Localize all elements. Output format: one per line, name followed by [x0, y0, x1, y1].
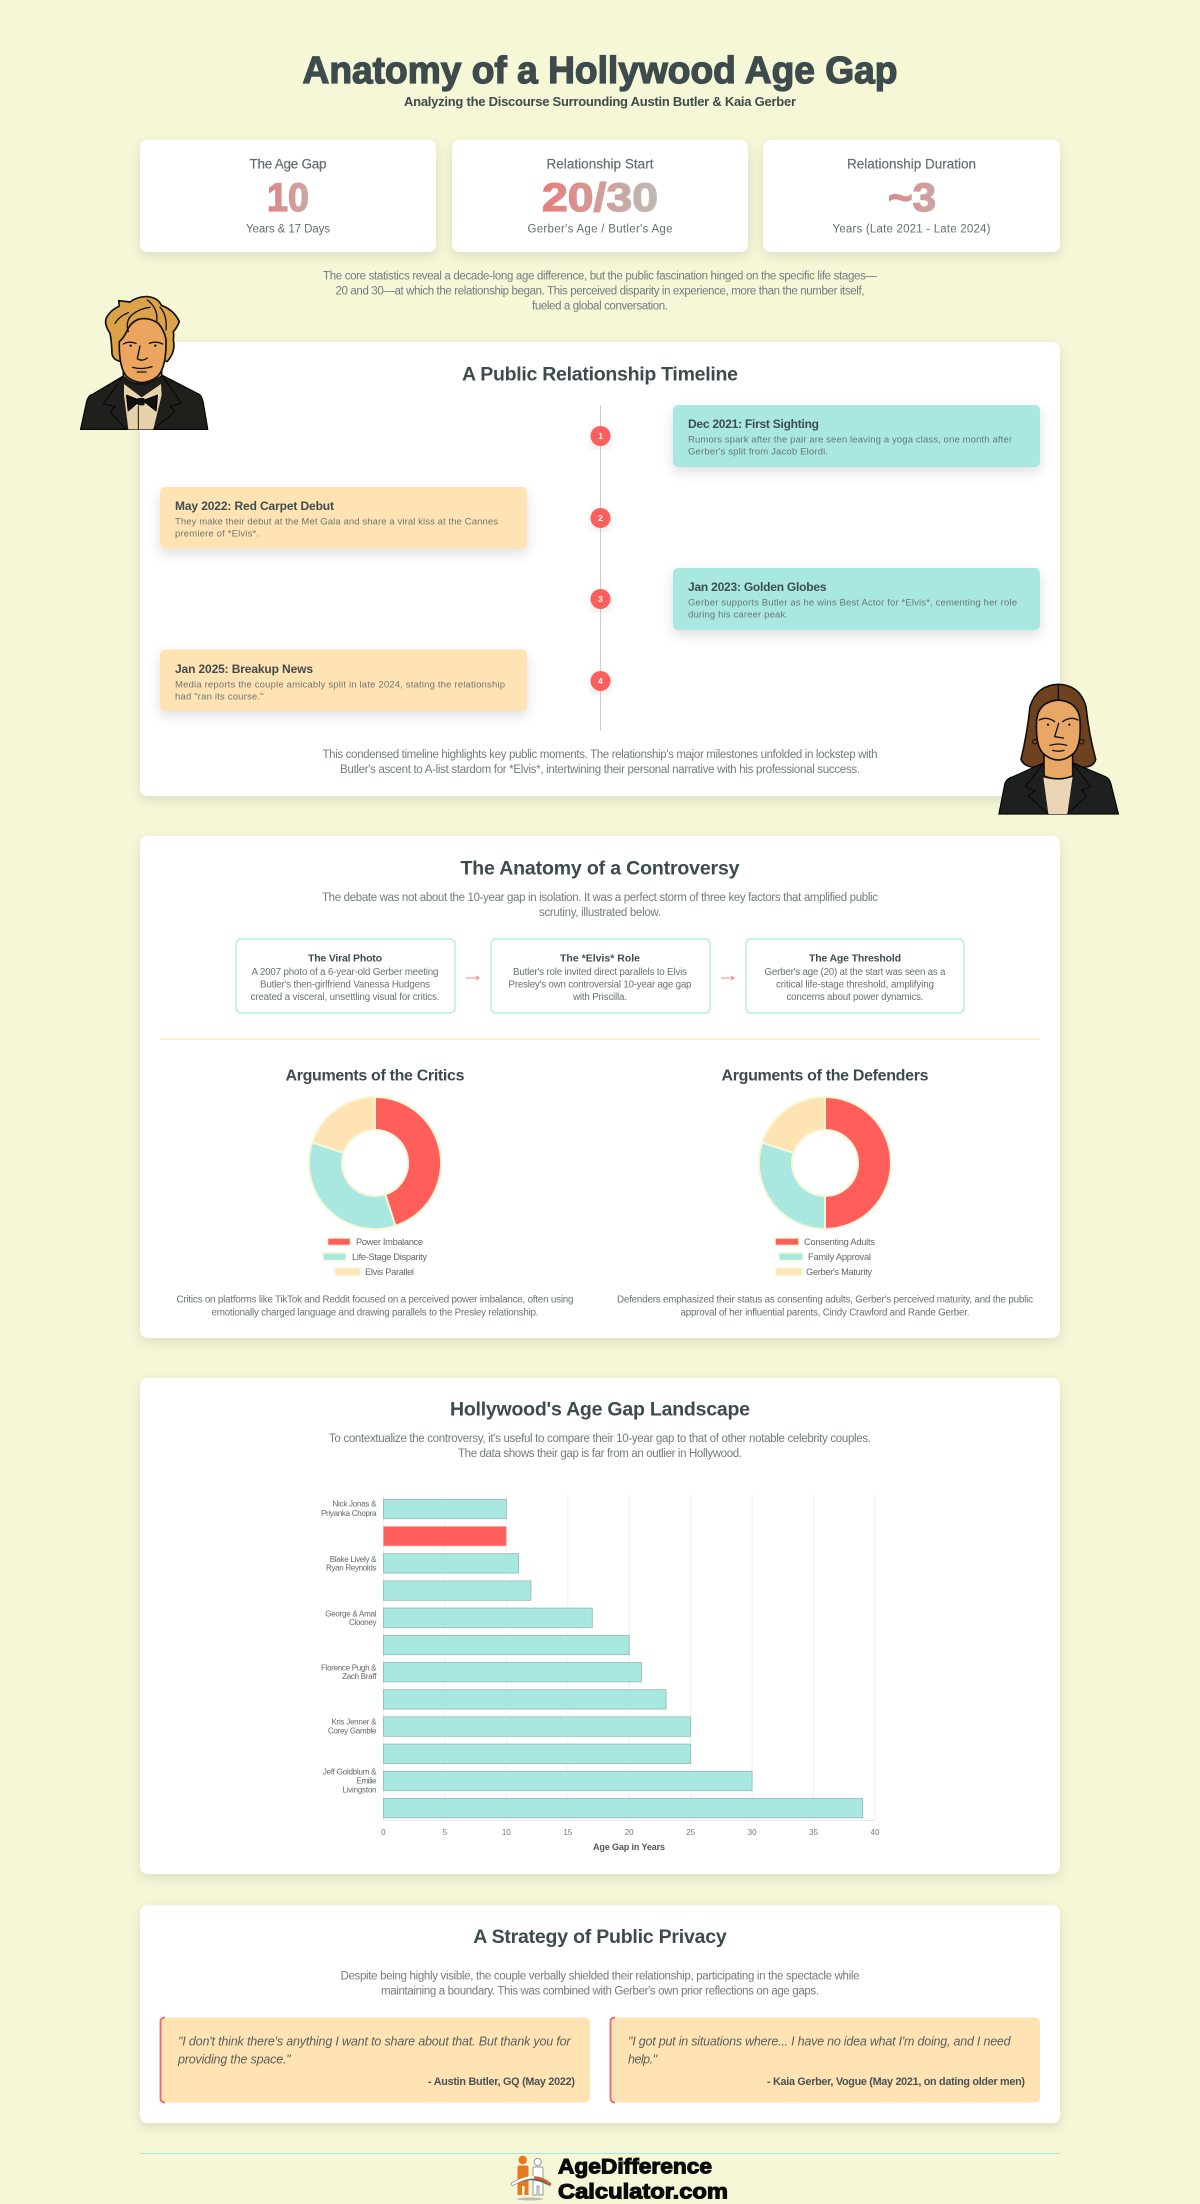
event: golden globes: Jan 2023: Golden Globes [688, 580, 827, 594]
icon: Kaia Gerber portrait [999, 684, 1118, 814]
factor: the age threshold: Gerber's age (20) at the start was seen as a [764, 967, 946, 978]
stat card: relationship start [452, 140, 748, 252]
critics legend [323, 1237, 427, 1277]
category labels: Jeff Goldblum & [323, 1767, 377, 1776]
critics text: emotionally charged language and drawing parallels to the Presley relationship. [212, 1308, 538, 1318]
category labels: Blake Lively & [330, 1555, 377, 1564]
chart: defenders donut [759, 1097, 891, 1229]
critics text [176, 1294, 574, 1318]
event: golden globes: Gerber supports Butler as he wins Best Actor for *Elvis*, cementing her role [688, 598, 1017, 608]
controversy intro: The debate was not about the 10-year gap in isolation. It was a perfect storm of three key factors that amplified public [322, 892, 878, 904]
icon: Austin Butler portrait [81, 297, 208, 429]
category labels: Livingston [342, 1785, 376, 1794]
privacy intro: Despite being highly visible, the couple verbally shielded their relationship, participating in the spectacle while [340, 1971, 860, 1983]
defenders legend: Gerber's Maturity [806, 1267, 872, 1277]
event: first sighting [673, 405, 1040, 467]
panel: timeline [140, 342, 1060, 796]
marker 4 [590, 671, 610, 691]
timeline axis [600, 405, 601, 731]
quote: Kaia Gerber: help." [628, 2052, 658, 2066]
event: first sighting: Gerber's split from Jacob Elordi. [688, 446, 828, 458]
event: breakup news [160, 650, 527, 711]
landscape intro [329, 1433, 871, 1460]
event: breakup news: Jan 2025: Breakup News [175, 662, 313, 676]
event: red carpet debut [160, 487, 527, 548]
factor: the age threshold [746, 939, 964, 1013]
bar chart: age gaps [321, 1495, 880, 1852]
event: red carpet debut: May 2022: Red Carpet Debut [175, 499, 334, 513]
event: breakup news: Media reports the couple amicably split in late 2024, stating the relationship [175, 680, 505, 690]
critics legend: Life-Stage Disparity [352, 1252, 427, 1262]
quote: Austin Butler: "I don't think there's anything I want to share about that. But thank you for [178, 2034, 571, 2048]
category labels: George & Amal [325, 1609, 377, 1618]
timeline summary: This condensed timeline highlights key public moments. The relationship's major milestones unfolded in lockstep with [322, 749, 878, 761]
axis tick labels: 30 [748, 1828, 757, 1837]
marker 1: 1 [598, 431, 603, 441]
quote: Kaia Gerber: "I got put in situations where... I have no idea what I'm doing, and I need [628, 2034, 1012, 2048]
factor: the Elvis role: The *Elvis* Role [560, 952, 640, 964]
landscape heading: Hollywood's Age Gap Landscape [450, 1398, 750, 1420]
category labels [321, 1500, 377, 1794]
stat caption: Years (Late 2021 - Late 2024) [832, 224, 991, 236]
event: golden globes [673, 568, 1040, 630]
axis title: Age Gap in Years [593, 1842, 665, 1852]
category labels: Clooney [349, 1618, 376, 1627]
axis tick labels: 40 [871, 1828, 880, 1837]
factor: the viral photo: created a visceral, unsettling visual for critics. [250, 992, 440, 1003]
site name: AgeDifference [558, 2154, 712, 2178]
arrow [721, 976, 734, 980]
bars [383, 1499, 863, 1818]
factor: the viral photo: Butler's then-girlfriend Vanessa Hudgens [260, 980, 430, 990]
quote: Kaia Gerber [610, 2018, 1040, 2102]
factor: the Elvis role [491, 939, 710, 1013]
controversy intro: scrutiny, illustrated below. [539, 907, 661, 919]
stat value: 20/30 [542, 176, 658, 220]
icon: age difference logo [512, 2156, 550, 2200]
factor: the Elvis role: Presley's own controversial 10-year age gap [508, 980, 692, 990]
factor: the viral photo: A 2007 photo of a 6-year-old Gerber meeting [252, 967, 438, 978]
landscape intro: To contextualize the controversy, it's useful to compare their 10-year gap to that of other notable celebrity couples. [329, 1433, 871, 1445]
timeline summary [322, 749, 878, 776]
timeline heading: A Public Relationship Timeline [462, 364, 738, 386]
factor: the viral photo [236, 939, 455, 1013]
controversy heading: The Anatomy of a Controversy [460, 858, 740, 880]
quote: Austin Butler: providing the space." [177, 2052, 291, 2066]
event: red carpet debut: premiere of *Elvis*. [175, 528, 259, 540]
stat value: ~3 [888, 176, 936, 220]
critics heading: Arguments of the Critics [286, 1068, 465, 1084]
event: red carpet debut: They make their debut at the Met Gala and share a viral kiss at the Cannes [175, 516, 498, 528]
marker 3: 3 [598, 594, 603, 604]
category labels: Emilie [356, 1777, 377, 1786]
event: first sighting: Dec 2021: First Sighting [688, 417, 819, 431]
defenders legend [775, 1237, 875, 1277]
marker 4: 4 [598, 676, 603, 686]
category labels: Corey Gamble [328, 1726, 377, 1735]
critics text: Critics on platforms like TikTok and Reddit focused on a perceived power imbalance, often using [176, 1294, 574, 1306]
footer logo: Calculator.com [558, 2180, 728, 2204]
defenders legend: Consenting Adults [804, 1237, 875, 1247]
arrow [466, 976, 479, 980]
factor: the Elvis role: with Priscilla. [572, 992, 627, 1003]
timeline summary: Butler's ascent to A-list stardom for *Elvis*, intertwining their personal narrative with his professional success. [340, 764, 860, 776]
critics legend: Power Imbalance [356, 1237, 423, 1247]
subtitle: Analyzing the Discourse Surrounding Austin Butler & Kaia Gerber [404, 94, 796, 109]
panel: controversy [140, 836, 1060, 1338]
defenders text [617, 1294, 1033, 1318]
defenders legend: Family Approval [808, 1252, 871, 1262]
axis tick labels: 25 [686, 1828, 696, 1837]
factor: the age threshold: concerns about power dynamics. [786, 992, 924, 1003]
category labels: Zach Braff [342, 1672, 377, 1681]
privacy intro [340, 1971, 860, 1998]
marker 2 [590, 508, 610, 528]
factor: the viral photo: The Viral Photo [308, 952, 382, 964]
intro text: The core statistics reveal a decade-long age difference, but the public fascination hinged on the specific life stages— [323, 270, 878, 282]
event: breakup news: had "ran its course." [175, 692, 264, 702]
stat label: The Age Gap [250, 156, 326, 172]
stat value: 10 [267, 176, 309, 220]
marker 2: 2 [598, 513, 603, 523]
stat caption: Years & 17 Days [246, 224, 330, 236]
privacy heading: A Strategy of Public Privacy [473, 1926, 727, 1948]
event: first sighting: Rumors spark after the pair are seen leaving a yoga class, one month after [688, 434, 1012, 446]
marker 1 [590, 426, 610, 446]
panel: public privacy [140, 1905, 1060, 2123]
axis tick labels: 0 [381, 1828, 386, 1837]
intro text: 20 and 30—at which the relationship began. This perceived disparity in experience, more than the number itself, [336, 286, 864, 298]
axis tick labels: 10 [502, 1828, 511, 1837]
footer logo [512, 2154, 728, 2204]
category labels: Ryan Reynolds [326, 1564, 376, 1573]
panel: age gap landscape [140, 1378, 1060, 1874]
defenders heading: Arguments of the Defenders [722, 1068, 929, 1084]
stat label: Relationship Duration [847, 156, 976, 172]
category labels: Florence Pugh & [321, 1663, 377, 1672]
privacy intro: maintaining a boundary. This was combined with Gerber's own prior reflections on age gaps. [381, 1986, 819, 1998]
axis tick labels: 35 [809, 1828, 819, 1837]
factor: the age threshold: The Age Threshold [809, 952, 901, 964]
defenders text: approval of her influential parents, Cindy Crawford and Rande Gerber. [680, 1308, 970, 1318]
marker 3 [590, 589, 610, 609]
chart: critics donut [309, 1097, 441, 1229]
axis tick labels: 15 [563, 1828, 573, 1837]
quote: Austin Butler: - Austin Butler, GQ (May 2022) [428, 2076, 575, 2088]
intro text [323, 270, 878, 312]
stat caption: Gerber's Age / Butler's Age [528, 224, 672, 236]
defenders text: Defenders emphasized their status as consenting adults, Gerber's perceived maturity, and the public [617, 1294, 1033, 1306]
axis tick labels: 5 [443, 1828, 448, 1837]
category labels: Kris Jenner & [332, 1718, 377, 1727]
controversy intro [322, 892, 878, 919]
title: Anatomy of a Hollywood Age Gap [302, 50, 898, 92]
landscape intro: The data shows their gap is far from an outlier in Hollywood. [458, 1448, 742, 1460]
quote: Kaia Gerber: - Kaia Gerber, Vogue (May 2021, on dating older men) [767, 2076, 1025, 2088]
stat card: relationship duration [763, 140, 1060, 252]
category labels: Nick Jonas & [332, 1500, 377, 1509]
axis tick labels [381, 1828, 880, 1837]
quote: Austin Butler [160, 2018, 590, 2102]
category labels: Priyanka Chopra [321, 1509, 377, 1518]
event: golden globes: during his career peak. [688, 610, 788, 620]
intro text: fueled a global conversation. [532, 300, 668, 312]
critics legend: Elvis Parallel [365, 1267, 414, 1277]
factor: the Elvis role: Butler's role invited direct parallels to Elvis [513, 967, 687, 978]
stat label: Relationship Start [546, 156, 654, 172]
factor: the age threshold: critical life-stage threshold, amplifying [776, 980, 934, 990]
stat card: the age gap [140, 140, 436, 252]
axis tick labels: 20 [625, 1828, 634, 1837]
